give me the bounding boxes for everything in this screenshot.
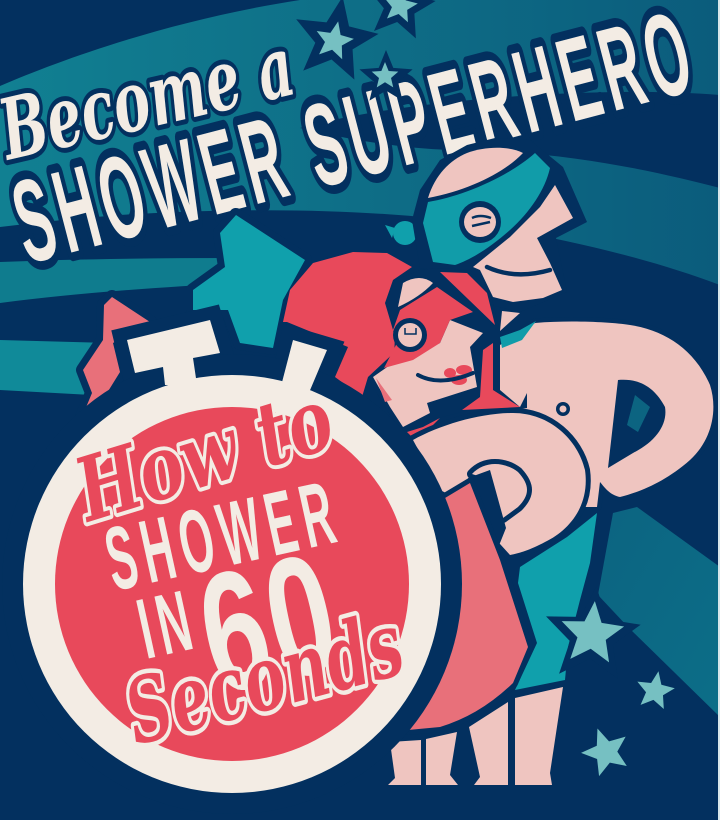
torso and arm (500, 322, 713, 507)
legs (388, 687, 563, 785)
text: How to: How to (62, 366, 345, 543)
head silhouette (412, 138, 587, 312)
small star above title (359, 50, 413, 101)
text: Seconds: Seconds (114, 591, 414, 766)
hero cape teal (193, 215, 305, 348)
blush (376, 378, 392, 402)
eye (393, 318, 427, 352)
eye (459, 201, 501, 243)
hair back (283, 252, 412, 397)
arm hole (608, 380, 665, 468)
watch rim (2, 354, 462, 814)
bottom stars (541, 582, 677, 779)
leotard (515, 513, 597, 690)
arm divider (468, 470, 506, 548)
nipple (556, 402, 570, 416)
lips (444, 365, 472, 385)
top stars (288, 0, 440, 82)
text: SHOWER: SHOWER (96, 460, 350, 610)
crown left (127, 320, 220, 380)
forehead (398, 278, 433, 307)
crown fills over rim (127, 320, 327, 395)
dress (408, 483, 528, 730)
bun (385, 218, 420, 248)
female superhero (283, 252, 586, 730)
skull (428, 148, 523, 198)
watch face (23, 375, 441, 793)
mask (384, 287, 473, 368)
face (473, 185, 573, 302)
neck (500, 311, 520, 331)
red dial (55, 407, 409, 761)
mask (423, 153, 550, 265)
smile (487, 267, 550, 274)
smile (418, 373, 473, 381)
collar (407, 418, 440, 438)
crown right (283, 340, 327, 392)
head outline (368, 268, 500, 432)
male superhero (385, 138, 713, 785)
collar (500, 321, 536, 348)
heroine cape salmon (82, 297, 150, 417)
long hair (462, 343, 520, 410)
arm hole (472, 464, 527, 518)
hair side (440, 272, 495, 325)
text: IN: IN (129, 571, 206, 677)
title (0, 0, 710, 289)
stopwatch (2, 320, 462, 814)
text: 60: 60 (183, 515, 355, 730)
face (373, 320, 483, 427)
arm (413, 413, 586, 555)
